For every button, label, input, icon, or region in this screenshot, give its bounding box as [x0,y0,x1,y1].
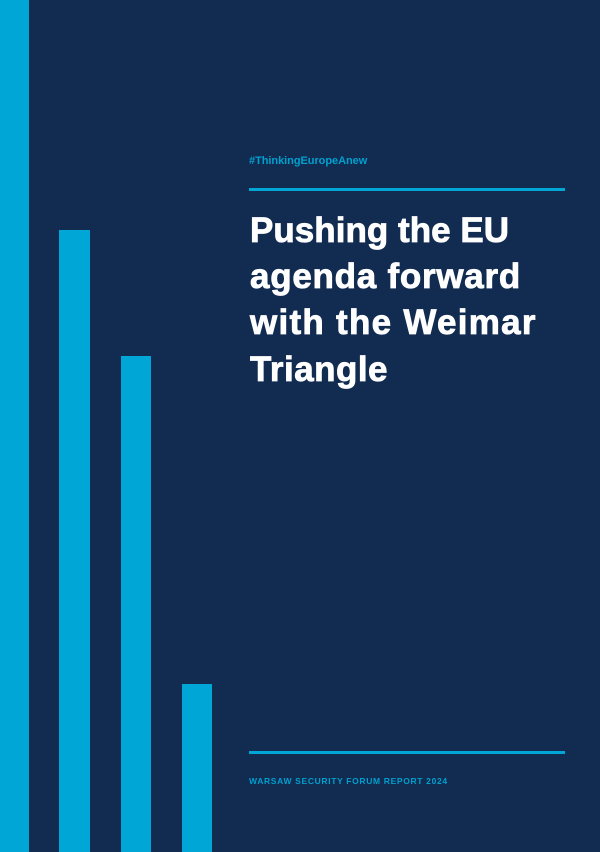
footer text: WARSAW SECURITY FORUM REPORT 2024 [249,776,448,786]
bar 3 [121,356,151,852]
top rule [249,188,565,191]
title: Pushing the EU [250,211,509,250]
title: with the Weimar [250,303,537,342]
bar 1 [0,0,29,852]
bottom rule [249,751,565,754]
bar 4 [182,684,212,852]
bar 2 [59,230,90,852]
title [249,211,537,389]
title: agenda forward [250,257,521,296]
title: Triangle [250,350,388,389]
hashtag: #ThinkingEuropeAnew [249,155,367,167]
